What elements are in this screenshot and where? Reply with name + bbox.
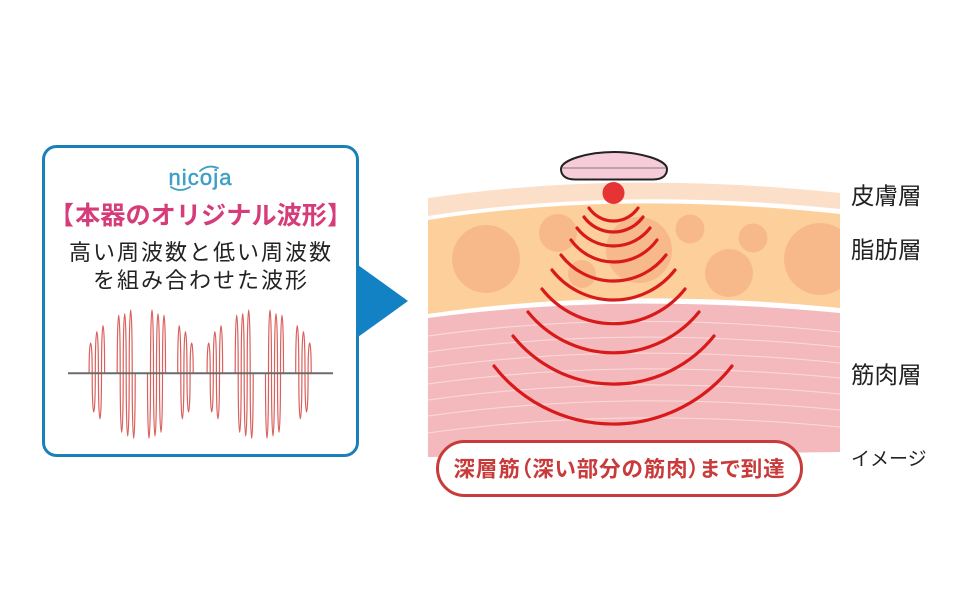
- heading: original waveform: 本器のオリジナル波形: [75, 202, 327, 230]
- text block: description: を組み合わせた波形: [93, 268, 309, 293]
- infographic canvas: [42, 145, 926, 497]
- panel: tissue layers diagram: [428, 152, 856, 457]
- label: fat layer: 脂肪層: [851, 237, 922, 263]
- label: skin layer: 皮膚層: [851, 183, 922, 209]
- arrow: card to diagram: [358, 265, 408, 337]
- muscle layer: [428, 304, 840, 457]
- label: image note: イメージ: [851, 449, 927, 470]
- fat cells: [452, 214, 856, 297]
- heading: original waveform: 】: [327, 202, 352, 230]
- panel: waveform card: [44, 146, 358, 456]
- fat layer: [428, 203, 840, 314]
- text block: description: 高い周波数と低い周波数: [69, 240, 333, 265]
- label: muscle layer: 筋肉層: [851, 362, 922, 388]
- device head: [561, 152, 667, 180]
- chart: combined waveform: [68, 310, 333, 438]
- callout: reaches deep muscle: 深層筋（深い部分の筋肉）まで到達: [453, 458, 786, 482]
- card frame: [44, 146, 358, 456]
- contact point: [602, 182, 624, 204]
- callout: reaches deep muscle: [438, 442, 802, 496]
- skin layer: [428, 183, 840, 216]
- logo: nicoja: nicoja: [168, 165, 233, 190]
- text block: description: [69, 240, 333, 293]
- heading: original waveform: 【: [49, 202, 74, 230]
- waves reaching deep muscle: [494, 208, 732, 424]
